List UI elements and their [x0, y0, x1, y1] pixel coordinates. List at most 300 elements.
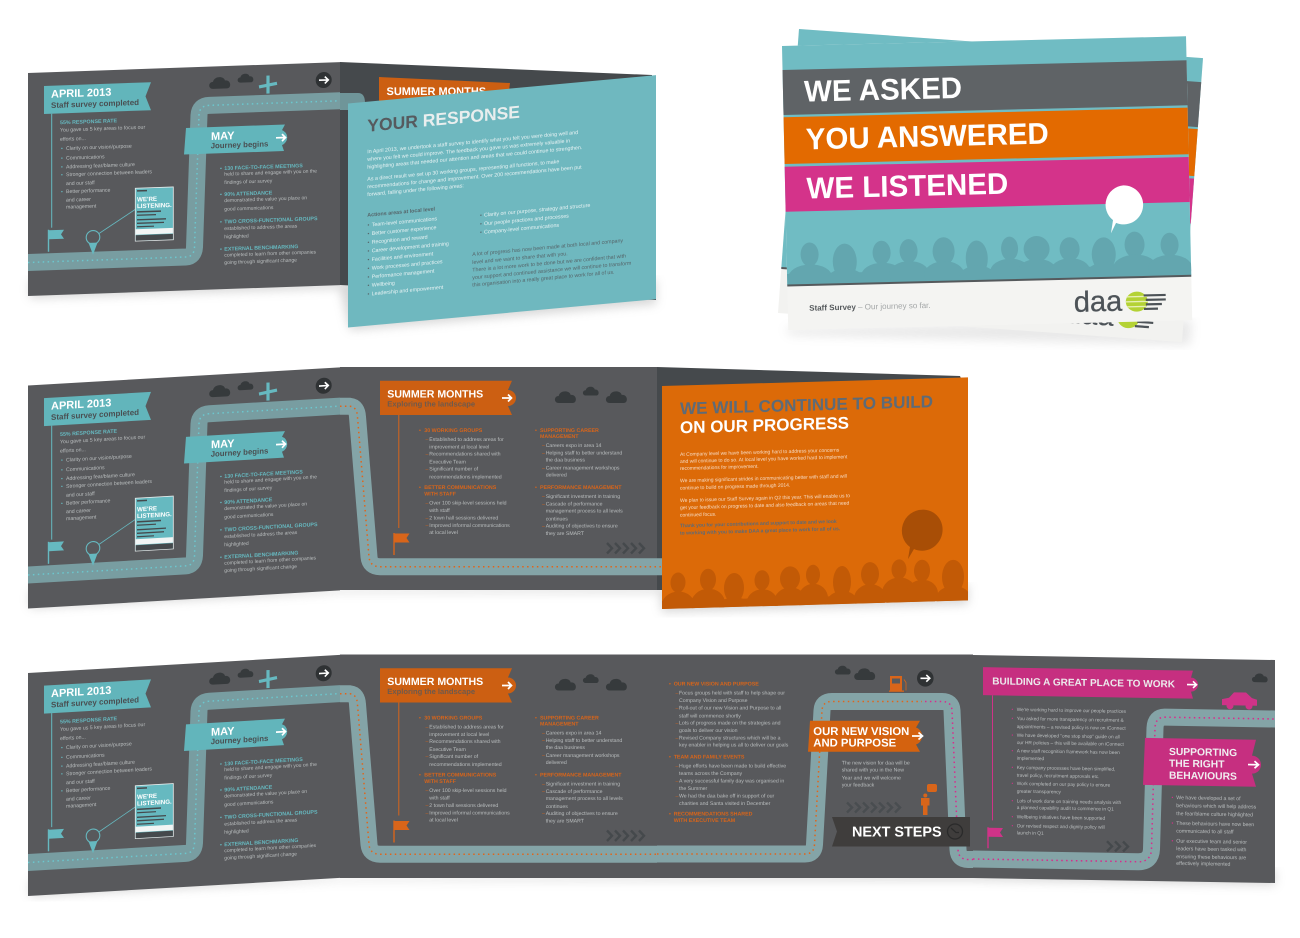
text: career and performance management: Careers expo in area 14	[546, 730, 601, 736]
banner: supporting the right behaviours	[1143, 738, 1261, 787]
text: behaviours list: behaviours which will help address	[1176, 803, 1257, 811]
text: working groups and communications: –	[426, 452, 428, 458]
text: career and performance management: continues	[546, 804, 568, 810]
text: people practices list: Our revised respect and dignity policy will	[1017, 823, 1105, 831]
road dots	[973, 714, 1275, 864]
heading: we will continue to build: ON OUR PROGRESS	[680, 414, 849, 437]
text: new vision note: Year and we will welcome	[842, 775, 901, 781]
text: response rate and focus areas: efforts on...	[60, 447, 86, 455]
text: introduction: In April 2013, we undertook a staff survey to identify what you felt you were doing well and	[367, 130, 578, 155]
timeline line	[992, 695, 993, 820]
text: body: We plan to issue our Staff Survey again in Q2 this year. This will enable us to	[680, 493, 850, 504]
icon: next arrow	[316, 377, 332, 394]
banner: next steps: NEXT STEPS	[852, 825, 942, 841]
text: behaviours list: effectively implemented	[1176, 861, 1231, 868]
text: may results: highlighted	[224, 828, 249, 836]
text: working groups and communications: •	[419, 716, 421, 722]
text: response rate and focus areas: Communications	[66, 753, 105, 761]
banner: april 2013	[44, 392, 151, 426]
icon: plane	[259, 382, 277, 401]
road dots	[340, 694, 657, 854]
banner: april 2013: Staff survey completed	[51, 695, 139, 709]
icon: next arrow	[316, 665, 332, 682]
banner: april 2013: APRIL 2013	[51, 397, 111, 413]
text: working groups and communications: recommendations implemented	[429, 762, 502, 768]
text: progress note: your support and continued assistance we will continue to transform	[472, 261, 632, 281]
text: body: get your feedback on progress to date and also feedback on areas that need	[680, 501, 850, 511]
text: working groups and communications: Over 100 skip-level sessions held	[429, 788, 507, 794]
text: career and performance management: –	[542, 465, 545, 471]
icon: clouds	[209, 381, 253, 397]
text: local action areas: Better customer experience	[372, 225, 437, 237]
banner: summer months	[380, 668, 516, 702]
text: may results: demonstrated the value you place on	[224, 789, 307, 800]
text: may results: good communications	[224, 512, 274, 521]
text: working groups and communications: Established to address areas for	[429, 724, 504, 730]
text: vision, family events, recommendations: A very successful family day was organised in	[679, 779, 784, 785]
text: career and performance management: Significant investment in training	[546, 782, 620, 788]
text: local action areas: •	[368, 257, 370, 263]
text: response rate and focus areas: management	[66, 204, 97, 211]
panel: summer months	[340, 367, 662, 590]
icon: next arrow	[316, 72, 332, 88]
text: local action areas: •	[368, 240, 370, 246]
text: response rate and focus areas: You gave us 5 key areas to focus our	[60, 125, 145, 134]
text: behaviours list: •	[1172, 821, 1174, 827]
banner: may: MAY	[211, 725, 235, 739]
poster thumbnail with pin: WE'RE	[137, 196, 157, 203]
text: may results: good communications	[224, 205, 274, 213]
shadow under cards	[785, 320, 1192, 345]
text: working groups and communications: –	[426, 810, 428, 816]
text: vision, family events, recommendations: charities and Santa visited in December	[679, 801, 771, 807]
text: may results: •	[220, 247, 222, 253]
text: behaviours list: the fear/blame culture highlighted	[1176, 811, 1253, 818]
text: local action areas: •	[368, 231, 370, 237]
banner: our new vision and purpose: AND PURPOSE	[813, 737, 897, 749]
text: career and performance management: PERFORMANCE MANAGEMENT	[540, 485, 622, 491]
cover cards stack	[778, 29, 1203, 345]
text: response rate and focus areas: 55% RESPONSE RATE	[60, 429, 117, 438]
text: career and performance management: –	[542, 811, 545, 817]
text: may results: 90% ATTENDANCE	[224, 785, 273, 794]
text: response rate and focus areas: •	[61, 146, 63, 152]
text: vision, family events, recommendations: OUR NEW VISION AND PURPOSE	[674, 682, 759, 688]
text: working groups and communications: at local level	[429, 530, 458, 536]
text: response rate and focus areas: Addressing fear/blame culture	[66, 162, 135, 170]
banner: may: MAY	[211, 130, 235, 143]
text: may results: 130 FACE-TO-FACE MEETINGS	[224, 757, 303, 768]
text: response rate and focus areas: Stronger connection between leaders	[66, 766, 152, 777]
text: introduction: where you felt we could improve. The feedback you gave us was extremely valuable in	[367, 138, 570, 163]
text: introduction: highlighting areas that needed our attention and areas that we could continue to strengthen.	[367, 145, 582, 171]
banner: our new vision and purpose: OUR NEW VISION	[813, 726, 909, 738]
text: career and performance management: Auditing of objectives to ensure	[546, 524, 618, 530]
text: working groups and communications: with staff	[429, 796, 450, 802]
road fragment	[340, 93, 365, 110]
banner: may: Journey begins	[211, 446, 269, 459]
text: people practices list: greater transparency	[1017, 789, 1062, 795]
text: local action areas	[367, 205, 449, 298]
text: people practices list: We have developed "one stop shop" guide on all	[1017, 733, 1120, 740]
icon: clouds	[555, 387, 627, 403]
text: behaviours list: leaders have been tasked with	[1176, 846, 1246, 853]
text: response rate and focus areas: •	[61, 172, 63, 178]
text: progress note: level and we want to share that with you.	[472, 251, 568, 266]
shadow under folder view 1	[30, 280, 656, 330]
text: response rate and focus areas: You gave us 5 key areas to focus our	[60, 722, 145, 733]
text: vision, family events, recommendations: key enabler in helping us all to deliver our goals	[679, 743, 789, 749]
text: career and performance management: continues	[546, 516, 568, 522]
text: response rate and focus areas: Better performance	[66, 188, 111, 195]
text: local action areas: Actions areas at local level	[367, 206, 436, 219]
text: career and performance management: MANAGEMENT	[540, 434, 579, 440]
panel: back sheet	[657, 367, 968, 590]
text: local action areas: Recognition and reward	[372, 235, 428, 246]
text: company action areas: Company-level communications	[484, 223, 559, 236]
text: may results: completed to learn from other companies	[224, 843, 317, 854]
text: response rate and focus areas: •	[61, 764, 63, 770]
text: working groups and communications: •	[419, 772, 421, 778]
text: local action areas: Career development and training	[372, 241, 449, 254]
text: may results: •	[220, 815, 222, 821]
text: people practices list: •	[1012, 815, 1014, 820]
text: working groups and communications	[419, 428, 510, 536]
text: may results: findings of our survey	[224, 485, 273, 494]
band: we listened	[785, 157, 1190, 212]
text: working groups and communications: –	[426, 754, 428, 760]
road dots: orange	[657, 702, 922, 854]
text: vision, family events, recommendations: goals to deliver our vision	[679, 728, 738, 734]
text: people practices list: You asked for more transparency on recruitment &	[1017, 716, 1125, 724]
text: career and performance management: the daa business	[546, 458, 585, 464]
text: may results: completed to learn from other companies	[224, 250, 317, 259]
text: vision, family events, recommendations: staff will commence shortly	[679, 713, 741, 719]
banner: summer months, mostly covered: SUMMER MONTHS	[386, 86, 486, 98]
text: introduction: forward, falling under the following areas:	[367, 183, 464, 198]
banner: may: Journey begins	[211, 734, 269, 746]
text: working groups and communications: recommendations implemented	[429, 474, 502, 480]
text: career and performance management: PERFORMANCE MANAGEMENT	[540, 772, 622, 778]
icon: chevrons	[1107, 841, 1128, 852]
text: may results: EXTERNAL BENCHMARKING	[224, 244, 298, 253]
crowd silhouette	[662, 560, 968, 609]
text: working groups and communications	[419, 716, 510, 824]
text: may results: held to share and engage with you on the	[224, 168, 317, 178]
banner: summer months: SUMMER MONTHS	[387, 389, 483, 401]
text: response rate and focus areas: You gave us 5 key areas to focus our	[60, 434, 145, 445]
text: response rate and focus areas: Stronger connection between leaders	[66, 169, 152, 178]
text: working groups and communications: 2 town hall sessions delivered	[429, 803, 498, 809]
text: may results: established to address the areas	[224, 224, 298, 232]
text: career and performance management: SUPPORTING CAREER	[540, 716, 599, 722]
text: company action areas: •	[480, 230, 482, 236]
text: may results: 130 FACE-TO-FACE MEETINGS	[224, 469, 303, 480]
text: local action areas: Team-level communications	[372, 216, 437, 228]
road	[28, 694, 340, 862]
panel: april and may journey	[28, 367, 340, 608]
text: may results: •	[220, 192, 222, 198]
poster thumbnail with pin: WE'RE	[137, 505, 157, 513]
icon: chevrons	[607, 543, 644, 554]
text: working groups and communications: –	[426, 788, 428, 794]
text: company action areas: •	[480, 213, 482, 219]
text: working groups and communications: –	[426, 515, 428, 521]
text: working groups and communications: Significant number of	[429, 754, 479, 760]
text: response rate and focus areas: Clarity on our vision/purpose	[66, 741, 132, 751]
text: may results: EXTERNAL BENCHMARKING	[224, 550, 298, 561]
text: may results	[220, 469, 318, 574]
text: people practices list: •	[1012, 749, 1014, 754]
icon: car	[1222, 692, 1257, 710]
icon: flag	[48, 229, 64, 252]
text: career and performance management: Career management workshops	[546, 465, 620, 471]
text: people practices list: A new staff recognition framework has now been	[1017, 748, 1120, 756]
panel: april and may journey	[28, 655, 340, 896]
text: response rate and focus areas: •	[61, 165, 63, 171]
text: response rate and focus areas: Better performance	[66, 498, 111, 507]
text: response rate and focus areas: 55% RESPONSE RATE	[60, 118, 117, 126]
text: may results: •	[220, 474, 222, 480]
text: people practices list: •	[1012, 782, 1014, 787]
road	[657, 702, 973, 860]
text: working groups and communications: –	[426, 500, 428, 506]
text: career and performance management: •	[535, 428, 537, 434]
text: may results: •	[220, 842, 222, 848]
text: career and performance management: –	[542, 524, 545, 530]
road dots	[28, 101, 340, 262]
folder view 3: full journey	[28, 654, 1275, 896]
icon: clouds	[555, 674, 627, 690]
text: thank you: to working with you to make DAA a great place to work for all of us.	[680, 526, 841, 537]
text: vision, family events, recommendations: Company Vision and Purpose	[679, 698, 748, 704]
text: response rate and focus areas: efforts on...	[60, 136, 86, 143]
text: people practices list: •	[1012, 799, 1014, 804]
text: working groups and communications: BETTER COMMUNICATIONS	[424, 772, 497, 778]
text: may results: 130 FACE-TO-FACE MEETINGS	[224, 163, 303, 172]
timeline line	[51, 713, 52, 827]
text: may results: demonstrated the value you place on	[224, 195, 307, 204]
text: people practices list: a planned capability audit to commence in Q1	[1017, 805, 1114, 813]
road dots	[340, 406, 662, 567]
text: people practices list: launch in Q1	[1017, 830, 1044, 837]
icon: speech bubble	[902, 509, 943, 559]
text: may results: good communications	[224, 799, 274, 808]
text: may results: EXTERNAL BENCHMARKING	[224, 838, 298, 848]
text: people practices list: implemented	[1017, 756, 1044, 762]
text: local action areas: •	[368, 283, 370, 289]
text: career and performance management: Cascade of performance	[546, 789, 603, 795]
icon: flag	[48, 828, 64, 851]
text: career and performance management: –	[542, 443, 545, 449]
poster thumbnail with pin	[86, 784, 173, 854]
text: career and performance management: SUPPORTING CAREER	[540, 428, 599, 434]
text: working groups and communications: –	[426, 724, 428, 730]
banner: summer months, mostly covered	[379, 77, 510, 120]
text: people practices list: •	[1012, 708, 1014, 713]
text: response rate and focus areas: •	[61, 745, 63, 751]
banner: building a great place to work: BUILDING A GREAT PLACE TO WORK	[992, 676, 1176, 690]
text: people practices list: Wellbeing initiatives have been supported	[1017, 814, 1105, 822]
text: vision, family events, recommendations: –	[676, 794, 678, 800]
text: vision, family events, recommendations	[669, 682, 789, 824]
logo: daa: daa	[1073, 286, 1123, 319]
text: vision, family events, recommendations: We had the daa bake off in support of our	[679, 794, 775, 800]
banner: our new vision and purpose	[808, 721, 922, 752]
text: working groups and communications: improvement at local level	[429, 732, 489, 738]
text: may results: completed to learn from other companies	[224, 555, 317, 567]
poster thumbnail with pin: WE'RE	[137, 793, 157, 801]
text: people practices list: •	[1012, 766, 1014, 771]
panel: april and may journey	[28, 62, 340, 296]
text: career and performance management: •	[535, 485, 537, 491]
text: people practices list: Work completed on our pay policy to ensure	[1017, 781, 1111, 789]
road	[28, 406, 340, 575]
text: working groups and communications: Executive Team	[429, 747, 466, 753]
band: you answered	[784, 108, 1189, 164]
text: career and performance management: Auditing of objectives to ensure	[546, 811, 618, 817]
text: vision, family events, recommendations: Revised Company structures which will be a	[679, 735, 781, 741]
text: vision, family events, recommendations: the Summer	[679, 786, 708, 792]
text: working groups and communications: –	[426, 523, 428, 529]
text: company action areas: Our people practices and processes	[484, 213, 569, 227]
text: working groups and communications: Improved informal communications	[429, 523, 510, 529]
text: may results: •	[220, 555, 222, 561]
text: career and performance management: –	[542, 753, 545, 759]
road dots	[28, 406, 340, 575]
text: vision, family events, recommendations: RECOMMENDATIONS SHARED	[674, 812, 753, 818]
band: you answered: YOU ANSWERED	[805, 118, 1049, 156]
banner: april 2013: Staff survey completed	[51, 408, 139, 422]
text: response rate and focus areas: •	[61, 467, 63, 474]
banner: may	[184, 431, 287, 463]
text: career and performance management: –	[542, 738, 545, 744]
text: people practices list: Lots of work done on training needs analysis with	[1017, 798, 1122, 806]
text: working groups and communications: Improved informal communications	[429, 810, 510, 816]
text: career and performance management: –	[542, 782, 545, 788]
text: local action areas: Facilities and environment	[372, 251, 434, 263]
text: working groups and communications: –	[426, 437, 428, 443]
text: progress note: There is a lot more work to be done but we are confident that with	[472, 254, 626, 274]
text: response rate and focus areas: and our staff	[66, 779, 95, 786]
text: working groups and communications: improvement at local level	[429, 444, 489, 450]
text: progress note: this organisation into a really great place to work for all of us.	[472, 270, 615, 289]
text: career and performance management: management process to all levels	[546, 509, 623, 515]
icon: speech bubble	[1105, 185, 1144, 233]
text: new vision note: shared with you in the New	[842, 768, 904, 774]
text: working groups and communications: at local level	[429, 818, 458, 824]
text: local action areas: •	[368, 223, 370, 229]
text: response rate and focus areas	[60, 714, 153, 810]
text: career and performance management: –	[542, 501, 545, 507]
text: body: We are making significant strides in communicating better with staff and will	[680, 474, 847, 484]
text: people practices list: appointments – a revised policy is now on iConnect	[1017, 724, 1126, 732]
text: behaviours list: •	[1172, 838, 1174, 845]
icon: person with speech bubble	[921, 784, 937, 815]
text: career and performance management: they are SMART	[546, 531, 585, 537]
banner: supporting the right behaviours: BEHAVIOURS	[1169, 771, 1237, 783]
text: may results	[220, 756, 318, 862]
text: working groups and communications: Over 100 skip-level sessions held	[429, 500, 507, 506]
icon: next arrow	[917, 670, 934, 687]
text: career and performance management	[535, 716, 623, 824]
banner: april 2013	[44, 679, 151, 714]
text: response rate and focus areas: •	[61, 772, 63, 778]
text: progress note: A lot of progress has now been made at both local and company	[472, 238, 623, 258]
text: vision, family events, recommendations: –	[676, 735, 678, 741]
poster thumbnail with pin	[86, 496, 173, 566]
text: working groups and communications: WITH STAFF	[424, 491, 457, 497]
footer text: Staff Survey – Our journey so far.	[809, 301, 931, 313]
text: career and performance management: •	[535, 772, 537, 778]
text: may results: held to share and engage with you on the	[224, 762, 317, 773]
poster thumbnail with pin: LISTENING.	[137, 202, 172, 210]
icon: plane	[259, 75, 277, 94]
text: career and performance management: MANAGEMENT	[540, 722, 579, 728]
icon: flag	[393, 820, 410, 842]
text: may results: 90% ATTENDANCE	[224, 497, 273, 506]
crowd silhouette	[787, 232, 1192, 285]
banner: april 2013: Staff survey completed	[51, 98, 139, 110]
road	[340, 406, 662, 567]
text: response rate and focus areas: 55% RESPONSE RATE	[60, 716, 117, 726]
text: vision, family events, recommendations: •	[669, 755, 671, 761]
folder view 1: your response	[28, 62, 656, 330]
logo: daa	[1073, 285, 1166, 319]
text: working groups and communications: 30 WORKING GROUPS	[424, 428, 483, 434]
text: working groups and communications: 2 town hall sessions delivered	[429, 515, 498, 521]
band: we listened: WE LISTENED	[806, 168, 1009, 205]
text: working groups and communications: BETTER COMMUNICATIONS	[424, 485, 497, 491]
text: response rate and focus areas: and our staff	[66, 180, 95, 187]
text: introduction: recommendations for change and improvement. Over 200 recommendations have been put	[367, 165, 582, 190]
text: local action areas: Wellbeing	[372, 281, 395, 289]
text: working groups and communications: Significant number of	[429, 467, 479, 473]
text: vision, family events, recommendations: Lots of progress made on the strategies and	[679, 721, 781, 727]
text: behaviours list: ensuring these behaviours are	[1176, 854, 1246, 861]
icon: clouds	[209, 668, 253, 685]
text: people practices list: •	[1012, 734, 1014, 739]
text: local action areas: Leadership and empowerment	[372, 285, 444, 297]
text: response rate and focus areas: •	[61, 788, 63, 795]
timeline line	[398, 702, 399, 816]
text: response rate and focus areas: •	[61, 755, 63, 761]
text: response rate and focus areas: and career	[66, 795, 91, 803]
banner: summer months: Exploring the landscape	[387, 400, 475, 409]
text: may results: 90% ATTENDANCE	[224, 190, 273, 198]
text: body: and will continue to do so. At local level you have worked hard to implement	[680, 454, 848, 465]
text: may results: highlighted	[224, 233, 249, 240]
text: career and performance management: delivered	[546, 760, 567, 766]
heading: your response: YOUR RESPONSE	[367, 102, 520, 136]
text: vision, family events, recommendations: WITH EXECUTIVE TEAM	[674, 818, 736, 824]
text: career and performance management	[535, 428, 623, 537]
text: people practices list: Key company processes have been simplified,	[1017, 765, 1115, 773]
text: response rate and focus areas: •	[61, 501, 63, 507]
text: local action areas: •	[368, 249, 370, 255]
text: career and performance management: –	[542, 494, 545, 500]
text: working groups and communications: WITH STAFF	[424, 779, 457, 785]
text: may results: TWO CROSS-FUNCTIONAL GROUPS	[224, 809, 318, 821]
banner: may: Journey begins	[211, 139, 269, 150]
text: career and performance management: management process to all levels	[546, 796, 623, 802]
text: response rate and focus areas: Communications	[66, 154, 105, 162]
text: may results: going through significant change	[224, 258, 297, 266]
text: new vision note: your feedback	[842, 783, 875, 789]
text: may results: TWO CROSS-FUNCTIONAL GROUPS	[224, 216, 318, 225]
text: response rate and focus areas	[60, 427, 153, 523]
text: response rate and focus areas: •	[61, 156, 63, 162]
